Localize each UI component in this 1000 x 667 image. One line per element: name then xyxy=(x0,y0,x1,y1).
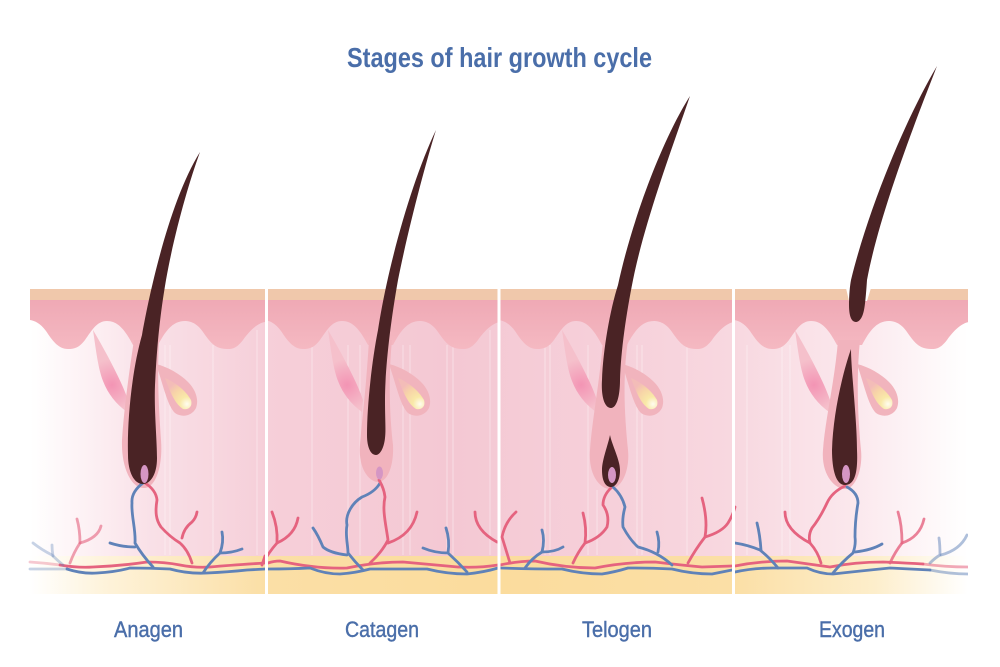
stage label: Catagen: Catagen xyxy=(345,617,419,642)
papilla xyxy=(608,467,616,483)
oil gland xyxy=(156,364,197,416)
new hair germ xyxy=(602,435,620,487)
shedding hair xyxy=(849,66,937,322)
follicle sheath xyxy=(590,340,628,489)
follicle sheath xyxy=(122,340,161,488)
muscle xyxy=(562,330,597,412)
stage label: Anagen: Anagen xyxy=(114,617,183,642)
oil gland xyxy=(389,364,430,416)
panel: Exogen xyxy=(735,66,968,574)
blood vessels xyxy=(263,480,498,574)
dermis wave layer xyxy=(30,299,969,349)
stage label: Exogen: Exogen xyxy=(819,617,885,642)
stage label: Telogen: Telogen xyxy=(582,617,652,642)
panel: Catagen xyxy=(263,130,498,574)
muscle xyxy=(93,330,128,412)
panel dividers xyxy=(265,285,974,597)
panel: Telogen xyxy=(500,96,735,574)
title: Stages of hair growth cycle xyxy=(347,42,652,73)
blood vessels xyxy=(30,483,265,573)
oil gland xyxy=(857,364,898,416)
papilla xyxy=(842,465,850,483)
oil gland xyxy=(622,364,663,416)
upper club hair xyxy=(602,96,690,408)
fat layer band xyxy=(30,556,968,594)
skin cross-section background xyxy=(30,300,968,594)
new growing hair xyxy=(832,349,857,485)
panel: Anagen xyxy=(30,152,265,573)
papilla xyxy=(376,466,383,480)
blood vessels xyxy=(500,487,735,574)
hair shaft xyxy=(367,130,436,455)
white notch around shedding hair xyxy=(846,288,871,301)
follicle sheath xyxy=(360,340,393,482)
blood vessels xyxy=(735,486,968,574)
follicle sheath xyxy=(823,340,861,489)
muscle xyxy=(328,330,363,412)
muscle xyxy=(795,330,830,412)
epidermis top band xyxy=(30,289,968,300)
papilla xyxy=(140,465,148,483)
hair shaft xyxy=(128,152,200,484)
